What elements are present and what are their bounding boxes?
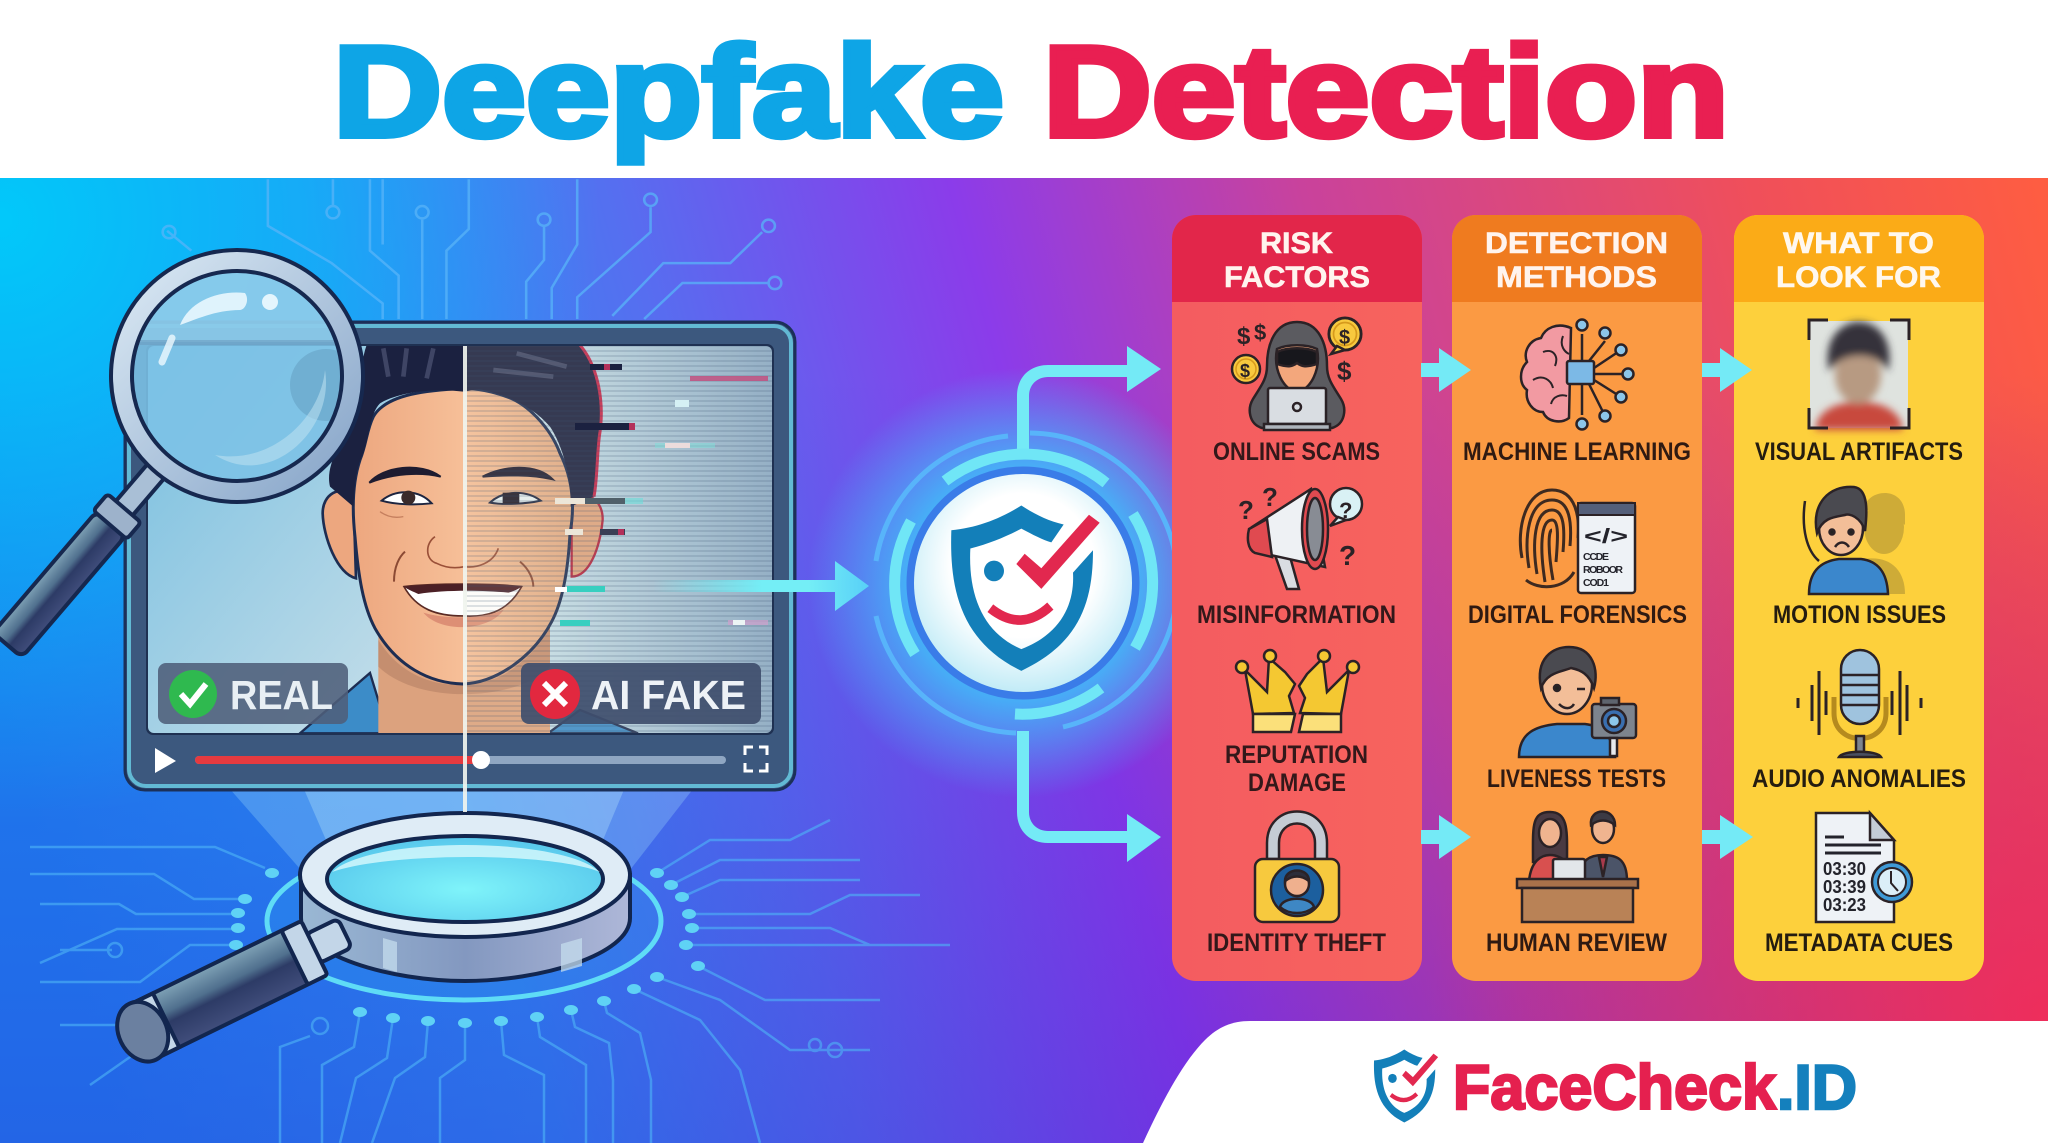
icon glyphs: question marks: ? [1262,482,1278,512]
panel header: RISK [1260,227,1333,260]
label: audio anomalies: AUDIO ANOMALIES [1752,765,1966,793]
panel: risk factors [1172,215,1422,981]
icon: brain with chip [1521,320,1634,430]
icon glyphs: dollar signs: $ [1254,320,1266,345]
video frame: real vs fake face [148,345,772,733]
icon: blurred face in frame [1809,320,1909,430]
glass [129,268,345,484]
icon: metadata document with clock: 03:39 [1823,877,1866,897]
title: Detection [1043,20,1729,164]
icon: person with motion ghost [1804,487,1905,594]
glitch bars [555,364,768,626]
panel: what to look for [1734,215,1984,981]
icon: fingerprint and code window: </> [1584,526,1628,548]
icon glyphs: question marks: ? [1339,540,1356,571]
label: reputation damage [1225,741,1368,797]
icon: fingerprint and code window: COD1 [1583,577,1609,589]
label: misinformation: MISINFORMATION [1197,601,1396,629]
ground glow ring [267,842,661,1000]
icon: fingerprint and code window [1520,490,1635,593]
top-left magnifying glass [0,250,363,659]
icon glyphs: dollar signs: $ [1339,327,1350,349]
icon: human reviewers at desk [1517,812,1638,922]
label: online scams: ONLINE SCAMS [1213,438,1380,466]
icon glyphs: dollar signs: $ [1240,361,1250,381]
connector up [1017,346,1161,450]
icon: hacker with laptop [1232,318,1361,430]
fake-half scanlines and tint [465,346,772,733]
label: liveness tests: LIVENESS TESTS [1487,765,1666,793]
panel: detection methods [1452,215,1702,981]
icon: microphone with waveform [1798,650,1921,757]
shield logo [951,506,1100,671]
panel header: FACTORS [1224,261,1370,294]
icon glyphs: dollar signs [1237,320,1352,386]
label: machine learning: MACHINE LEARNING [1463,438,1691,466]
connector down [1017,731,1161,862]
label: motion issues: MOTION ISSUES [1773,601,1946,629]
label: reputation damage: REPUTATION [1225,741,1368,769]
icon glyphs: dollar signs: $ [1237,323,1251,350]
logo shield [1374,1050,1438,1122]
icon glyphs: question marks: ? [1238,495,1254,525]
controls: play, progress, fullscreen [155,747,767,773]
title: Deepfake [333,20,1004,164]
flow arrows between panels [1421,348,1753,859]
lens glass [327,836,603,922]
icon: megaphone [1248,488,1362,589]
page background: white title band [0,0,2048,178]
arrow: video to shield [653,561,869,611]
label: digital forensics: DIGITAL FORENSICS [1468,601,1687,629]
icon: padlock with face [1255,812,1339,922]
panel header [1452,215,1702,302]
video player [125,322,795,790]
label: metadata cues: METADATA CUES [1765,929,1953,957]
title [333,20,1729,164]
logo wordmark: FaceCheck [1453,1053,1777,1123]
label: visual artifacts: VISUAL ARTIFACTS [1755,438,1963,466]
logo wordmark: .ID [1777,1053,1857,1123]
icon glyphs: question marks: ? [1339,498,1352,523]
icon: person with camera [1519,647,1636,757]
icon: fingerprint and code window: ROBOOR [1583,564,1623,576]
circuit traces: top [163,179,781,319]
central shield emblem [808,346,1238,862]
glints [180,292,247,325]
icon: metadata document with clock [1816,813,1912,922]
divider line real / fake [463,346,467,812]
ring [122,261,352,491]
badge: AI FAKE [521,663,761,724]
icon: metadata document with clock: 03:23 [1823,895,1866,915]
lower magnifying glass [108,813,661,1070]
panel header: METHODS [1496,261,1657,294]
panel header: LOOK FOR [1776,261,1941,294]
badge: REAL [158,663,348,724]
light beam from lens to video [222,780,700,870]
panel header: WHAT TO [1783,227,1934,260]
circuit traces: bottom radial [30,820,950,1143]
glow [808,368,1238,798]
label: reputation damage: DAMAGE [1248,769,1346,797]
badge: REAL: REAL [230,672,333,718]
handle [108,905,359,1070]
footer logo panel [1143,1021,2048,1143]
icon glyphs: dollar signs: $ [1337,356,1352,386]
panel header [1172,215,1422,302]
icon: cracked crown [1236,650,1359,732]
lens ring [300,813,630,937]
rings [876,433,1178,733]
icon: metadata document with clock: 03:30 [1823,859,1866,879]
icon glyphs: question marks [1238,482,1356,571]
label: human review: HUMAN REVIEW [1486,929,1667,957]
panel header: DETECTION [1485,227,1668,260]
lens body [301,875,630,981]
icon: fingerprint and code window: CCDE [1583,551,1609,563]
panel header [1734,215,1984,302]
handle [0,451,177,659]
label: identity theft: IDENTITY THEFT [1207,929,1386,957]
badge: AI FAKE: AI FAKE [591,672,746,718]
